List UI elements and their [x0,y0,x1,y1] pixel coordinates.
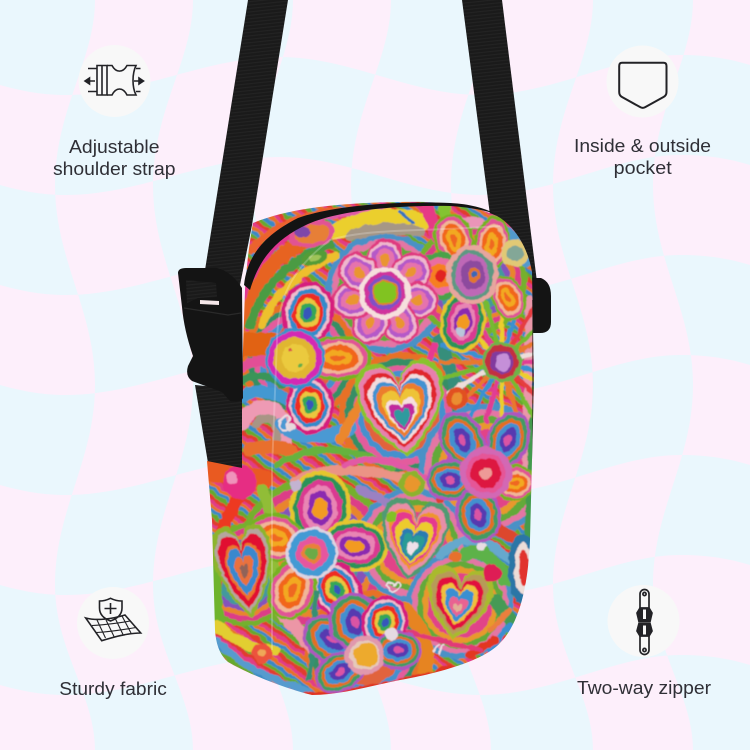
icon: zipper pulls [637,590,652,654]
icon: buckle [85,66,144,95]
right side buckle [532,278,551,333]
feature: sturdy fabric [59,587,167,699]
top zipper [244,203,496,290]
painted flower top left blob [288,220,336,266]
right shoulder strap [462,0,537,290]
bag with colourful painted pattern [207,202,534,695]
left side buckle [178,268,243,402]
painted heart H lower centre [381,496,450,580]
rainbow halos behind the motifs [220,227,532,693]
painted flower F right [399,387,538,546]
painted sunburst [437,299,534,425]
painted flower G lower left [241,469,391,680]
feature: inside and outside pocket [574,46,711,178]
panel seam shading [272,226,500,650]
painted large heart centre [354,357,445,457]
label: Sturdy fabric [59,679,167,699]
fabric tone overlay [200,195,545,700]
label: Two-way zipper [577,678,711,698]
left shoulder strap, lower [195,385,246,472]
label line 2: pocket [614,158,672,178]
painted flower A top centre [327,238,443,351]
icon background circle [77,587,149,659]
bag outer edge shading [532,300,534,458]
label line 2: shoulder strap [53,159,176,179]
label: Inside & outside [574,136,711,156]
left shoulder strap, upper [205,0,288,285]
buckle ribbed inset [186,280,217,303]
label: Adjustable [69,137,160,157]
painted base [200,195,545,700]
background brush streaks [207,208,532,696]
icon background circle [78,45,150,117]
icon background circle [608,585,680,657]
buckle joint highlight [184,308,241,315]
painted flower B top right [425,213,528,354]
painted heart I side pocket [212,523,272,619]
icon: shield over fabric [86,598,141,641]
feature: adjustable shoulder strap [53,45,176,179]
buckle slot [200,300,219,305]
painted right edge arcs and accents [223,327,536,663]
painted flower K bottom centre [302,592,422,694]
buckle silhouette [178,268,243,402]
painted heart J lower right [426,564,494,640]
feature: two-way zipper [577,585,711,698]
painted flower C left [265,277,372,436]
icon background circle [606,46,678,118]
icon: pocket [619,63,666,108]
